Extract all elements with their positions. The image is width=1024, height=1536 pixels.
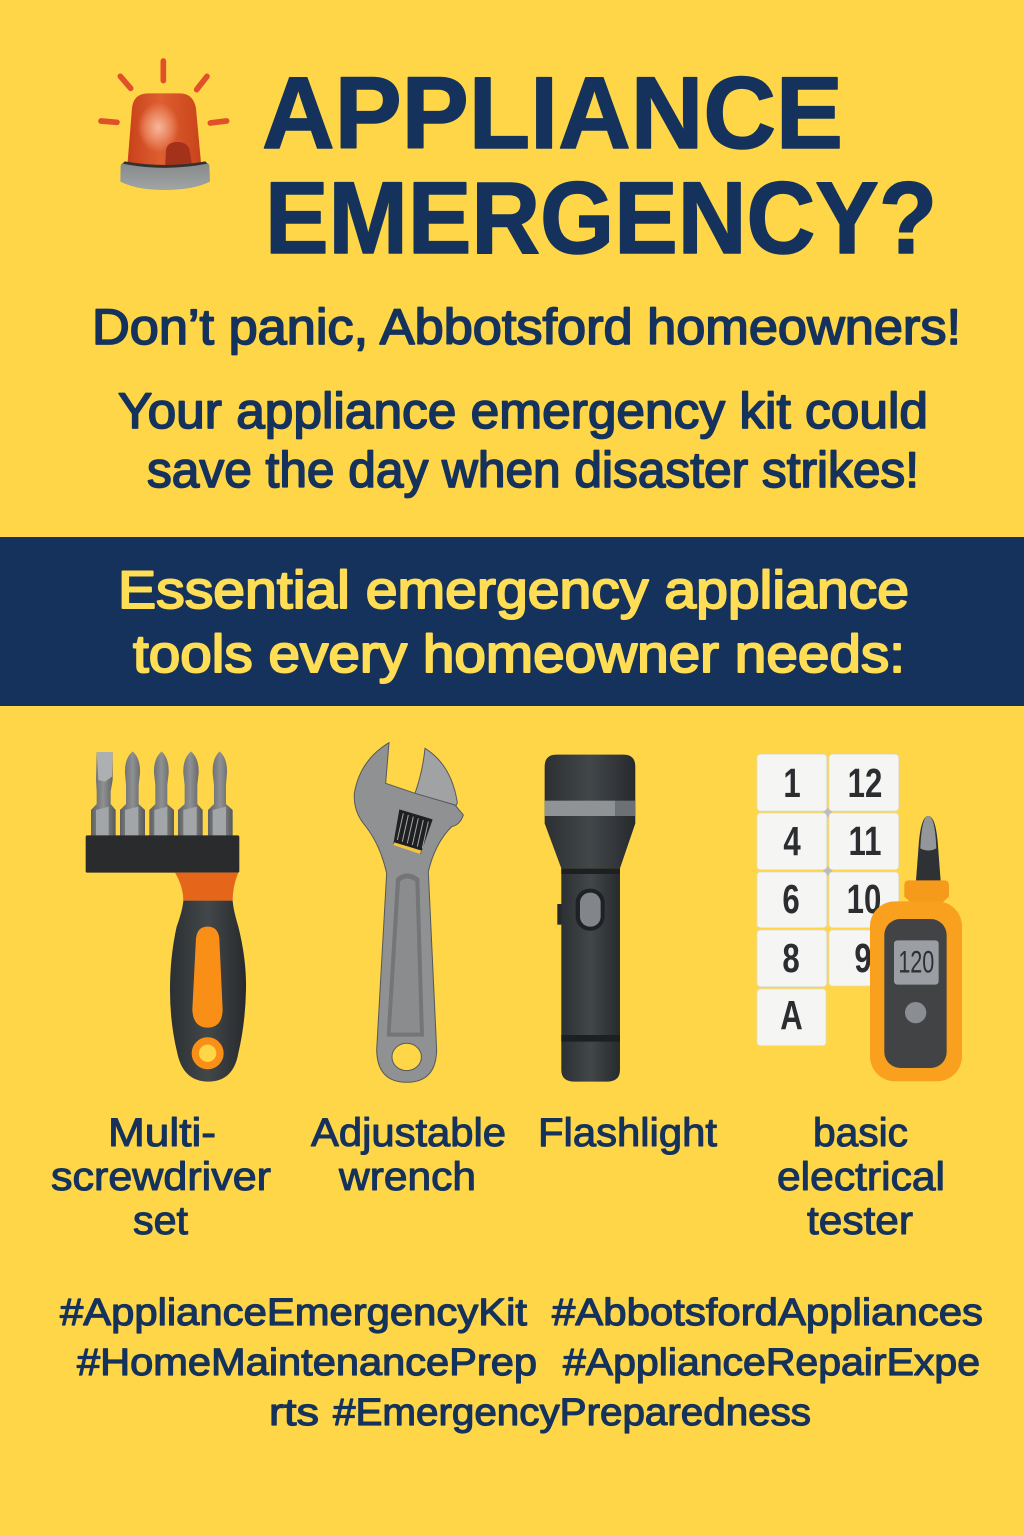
label: adjustable wrench: wrench	[338, 1155, 476, 1199]
label: multi-screwdriver set: screwdriver	[51, 1155, 271, 1199]
tester probe	[916, 816, 941, 881]
label: multi-screwdriver set	[51, 1111, 271, 1243]
label: basic electrical tester: basic	[813, 1111, 908, 1155]
icon: adjustable wrench	[354, 743, 463, 1082]
fuse label grid: 9	[854, 935, 872, 981]
tester button	[905, 1002, 926, 1023]
screwdriver collar	[175, 873, 238, 901]
title: APPLIANCE	[262, 56, 843, 170]
fuse label grid: A	[780, 992, 803, 1038]
screwdriver holder block	[86, 835, 239, 873]
hashtags: #ApplianceEmergencyKit	[60, 1292, 527, 1334]
hashtags: #ApplianceRepairExpe	[563, 1342, 980, 1384]
tester neck	[904, 880, 949, 903]
fuse label grid: 12	[848, 760, 882, 806]
hashtags: #HomeMaintenancePrep	[77, 1342, 537, 1384]
screwdriver handle	[170, 901, 246, 1082]
flashlight button	[576, 889, 605, 931]
hashtags	[60, 1292, 983, 1434]
wrench adjuster knurl	[393, 809, 433, 854]
wrench handle groove	[387, 873, 424, 1037]
tester body	[870, 901, 962, 1081]
fuse label grid: 11	[849, 818, 881, 864]
fuse label grid	[757, 754, 899, 1046]
fuse label grid: 4	[783, 818, 801, 864]
screwdriver hanging ring	[195, 1041, 220, 1066]
hashtags: #AbbotsfordAppliances	[552, 1292, 983, 1334]
title	[262, 56, 937, 275]
beacon base	[120, 161, 210, 190]
wrench right jaw	[415, 748, 457, 808]
tester face	[884, 919, 947, 1068]
icon: fuse labels and electrical tester	[757, 754, 962, 1081]
icon: red emergency beacon	[101, 61, 227, 190]
flashlight silver band	[545, 801, 635, 816]
banner: essential tools heading	[0, 537, 1024, 706]
hashtags: rts	[269, 1392, 319, 1434]
text block: emergency kit message: save the day when disaster strikes!	[147, 442, 919, 498]
icon: flashlight	[545, 755, 635, 1082]
label: basic electrical tester	[777, 1111, 945, 1243]
tester display: 120	[898, 945, 934, 980]
text block: emergency kit message	[118, 383, 928, 498]
flashlight body	[561, 868, 620, 1082]
title: EMERGENCY?	[265, 161, 937, 275]
label: basic electrical tester: tester	[807, 1199, 913, 1243]
label: flashlight: Flashlight	[538, 1111, 717, 1155]
label: basic electrical tester: electrical	[777, 1155, 945, 1199]
label: multi-screwdriver set: Multi-	[108, 1111, 216, 1155]
flashlight grooves	[561, 868, 620, 1042]
fuse label grid: 10	[847, 876, 881, 922]
text block: emergency kit message: Your appliance emergency kit could	[118, 383, 928, 439]
fuse label grid: 1	[783, 760, 801, 806]
label: adjustable wrench	[311, 1111, 506, 1199]
tester display	[894, 940, 939, 985]
flashlight head	[545, 755, 635, 868]
banner: essential tools heading: Essential emergency appliance	[118, 561, 909, 620]
beacon dome	[127, 93, 202, 170]
banner: essential tools heading: tools every homeowner needs:	[133, 625, 905, 684]
wrench body	[354, 743, 463, 1082]
label: adjustable wrench: Adjustable	[311, 1111, 506, 1155]
screwdriver bits	[91, 751, 233, 836]
hashtags: #EmergencyPreparedness	[333, 1392, 811, 1434]
fuse label grid: 8	[782, 935, 800, 981]
icon: multi-screwdriver set	[86, 751, 246, 1082]
fuse label grid: 6	[782, 876, 800, 922]
flashlight side switch	[557, 904, 562, 925]
label: multi-screwdriver set: set	[133, 1199, 188, 1243]
subtitle: don't panic: Don’t panic, Abbotsford homeowners!	[92, 299, 961, 355]
beacon rays	[101, 61, 227, 123]
screwdriver orange grip	[192, 927, 223, 1028]
